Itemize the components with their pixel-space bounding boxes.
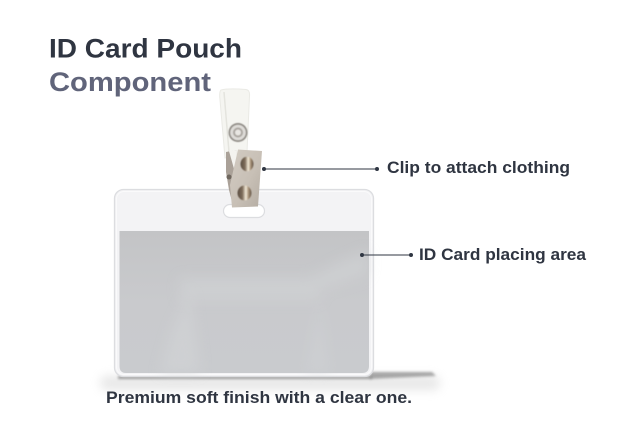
title: [49, 34, 242, 97]
card placing area: [120, 231, 369, 373]
plate holes: [238, 157, 254, 200]
clip rear jaw: [226, 150, 237, 205]
clip: [220, 89, 262, 208]
title: ID Card Pouch: [49, 34, 242, 64]
callout: ID card placing area: ID Card placing area: [419, 245, 587, 264]
ID card pouch: [114, 190, 374, 376]
hanging slot: [224, 204, 264, 218]
callout: clip to attach clothing: [262, 158, 570, 177]
caption: Premium soft finish with a clear one.: [106, 388, 412, 407]
title: Component: [49, 67, 211, 97]
clear strap: [220, 89, 250, 158]
callout: clip to attach clothing: Clip to attach clothing: [387, 158, 570, 177]
rivet: [228, 123, 248, 142]
metal plate: [230, 150, 262, 208]
pouch shadow: [100, 372, 440, 390]
pouch body: [114, 190, 374, 376]
